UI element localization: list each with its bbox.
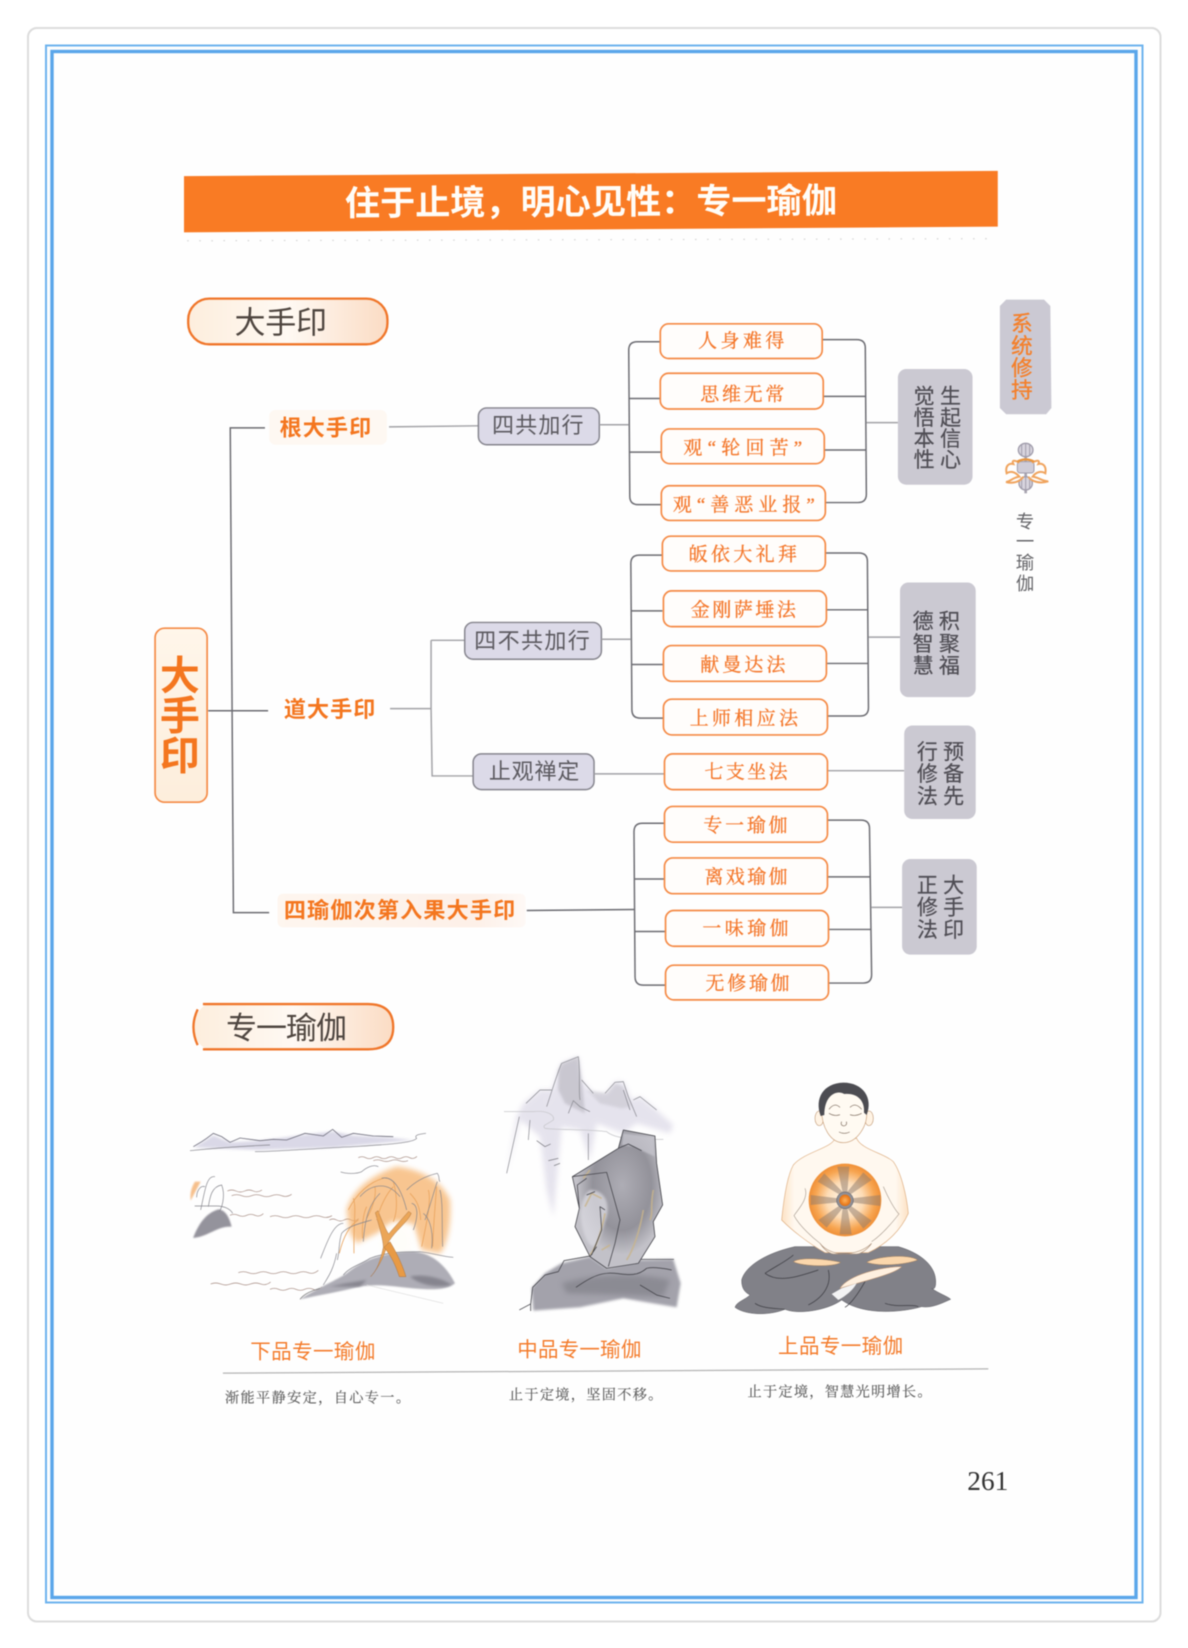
practice box: 七支坐法 xyxy=(664,754,827,790)
node: 四共加行: 四共加行 xyxy=(492,413,584,438)
result box: 生起信心 觉悟本性: 觉悟本性 xyxy=(914,386,935,472)
result box: 生起信心 觉悟本性: 生起信心 xyxy=(940,386,961,472)
无修瑜伽 xyxy=(666,965,829,1000)
离戏瑜伽 xyxy=(664,858,827,894)
practice boxes group 2 xyxy=(662,536,827,735)
一味瑜伽: 一味瑜伽 xyxy=(702,918,789,940)
node: 四不共加行: 四不共加行 xyxy=(474,629,590,654)
思维无常 xyxy=(660,373,823,409)
上师相应法 xyxy=(663,699,827,735)
tree trunk connectors xyxy=(208,428,269,913)
illustration: meditating figure with chest wheel xyxy=(735,1083,951,1314)
皈依大礼拜: 皈依大礼拜 xyxy=(689,543,797,565)
result box: 大手印正修法 xyxy=(902,859,977,955)
practice boxes group 1 xyxy=(660,324,825,520)
title banner xyxy=(184,171,998,232)
rock mound xyxy=(300,1252,455,1299)
illustration: willow and water xyxy=(190,1129,455,1303)
side tab: 系统修持 xyxy=(1000,300,1051,414)
willow branches xyxy=(339,1178,437,1253)
金刚萨埵法: 金刚萨埵法 xyxy=(691,599,797,621)
section heading: 专一瑜伽: 专一瑜伽 xyxy=(226,1011,347,1046)
section heading: 大手印 xyxy=(188,299,387,344)
人身难得 xyxy=(660,324,822,359)
观“轮回苦”: 观“轮回苦” xyxy=(683,437,802,459)
branch: 根大手印 xyxy=(269,410,387,445)
practice boxes group 3 xyxy=(664,806,829,1000)
robe xyxy=(735,1247,951,1314)
brackets group 3 xyxy=(634,820,902,985)
brackets group 2 xyxy=(601,553,900,718)
description: 上品: 止于定境，智慧光明增长。 xyxy=(748,1383,932,1400)
connector: 七支坐法 xyxy=(594,771,904,774)
result box: 预备先行修法: 预备先 xyxy=(943,741,964,808)
一味瑜伽 xyxy=(666,911,829,946)
离戏瑜伽: 离戏瑜伽 xyxy=(704,866,788,888)
人身难得: 人身难得 xyxy=(698,330,784,352)
illustration: mountain and rock xyxy=(504,1057,681,1311)
branch: 四瑜伽次第入果大手印: 四瑜伽次第入果大手印 xyxy=(284,898,515,923)
node: 止观禅定 xyxy=(473,754,594,790)
思维无常: 思维无常 xyxy=(700,384,784,406)
chest wheel xyxy=(809,1164,881,1236)
hands xyxy=(820,1243,872,1254)
side label: 专一瑜伽: 专一瑜伽 xyxy=(1016,511,1034,594)
icon: double vajra xyxy=(1006,443,1048,493)
观“轮回苦” xyxy=(661,429,824,464)
result box: 预备先行修法 xyxy=(904,725,976,819)
献曼达法: 献曼达法 xyxy=(700,654,786,676)
专一瑜伽: 专一瑜伽 xyxy=(703,815,788,837)
side tab: 系统修持: 系统修持 xyxy=(1011,311,1033,402)
section heading: 专一瑜伽 xyxy=(193,1004,393,1049)
result box: 积聚福德智慧: 积聚福 xyxy=(939,611,960,678)
practice box: 七支坐法: 七支坐法 xyxy=(704,761,789,783)
willow trunk xyxy=(371,1211,411,1277)
result box: 大手印正修法: 正修法 xyxy=(917,875,938,942)
water ripples xyxy=(211,1156,417,1290)
section heading: 大手印: 大手印 xyxy=(234,305,327,340)
left small islet xyxy=(190,1177,233,1238)
result box: 生起信心 觉悟本性 xyxy=(898,369,973,485)
node: 止观禅定: 止观禅定 xyxy=(489,759,579,784)
head xyxy=(815,1083,873,1143)
branch: 道大手印: 道大手印 xyxy=(284,697,375,722)
result box: 大手印正修法: 大手印 xyxy=(943,875,964,942)
caption: 下品专一瑜伽: 下品专一瑜伽 xyxy=(250,1340,375,1363)
branch: 根大手印: 根大手印 xyxy=(280,415,371,440)
base rock xyxy=(532,1257,681,1311)
无修瑜伽: 无修瑜伽 xyxy=(705,972,790,994)
caption: 上品专一瑜伽: 上品专一瑜伽 xyxy=(778,1335,903,1358)
page number: 261 xyxy=(967,1466,1008,1496)
standing rock xyxy=(572,1130,663,1268)
专一瑜伽 xyxy=(664,806,827,842)
body xyxy=(782,1138,908,1253)
description: 下品: 渐能平静安定，自心专一。 xyxy=(225,1390,410,1407)
brackets group 1 xyxy=(599,340,898,505)
皈依大礼拜 xyxy=(662,536,825,571)
献曼达法 xyxy=(663,646,826,681)
root node: 大手印: 大手印 xyxy=(160,655,200,779)
观“善恶业报” xyxy=(661,486,825,520)
金刚萨埵法 xyxy=(663,591,826,627)
title banner: 住于止境，明心见性：专一瑜伽 xyxy=(345,182,837,223)
node: 四不共加行 xyxy=(465,622,601,659)
result box: 积聚福德智慧: 德智慧 xyxy=(913,611,934,678)
result box: 积聚福德智慧 xyxy=(900,582,976,697)
description: 中品: 止于定境，坚固不移。 xyxy=(509,1386,662,1403)
caption: 中品专一瑜伽: 中品专一瑜伽 xyxy=(517,1338,641,1361)
willow foliage xyxy=(347,1167,450,1253)
上师相应法: 上师相应法 xyxy=(690,707,799,729)
root node: 大手印 xyxy=(155,628,207,802)
branch: 四瑜伽次第入果大手印 xyxy=(278,894,526,927)
观“善恶业报”: 观“善恶业报” xyxy=(673,494,815,516)
result box: 预备先行修法: 行修法 xyxy=(917,741,938,808)
feet and shin xyxy=(793,1256,918,1300)
node: 四共加行 xyxy=(478,408,599,445)
